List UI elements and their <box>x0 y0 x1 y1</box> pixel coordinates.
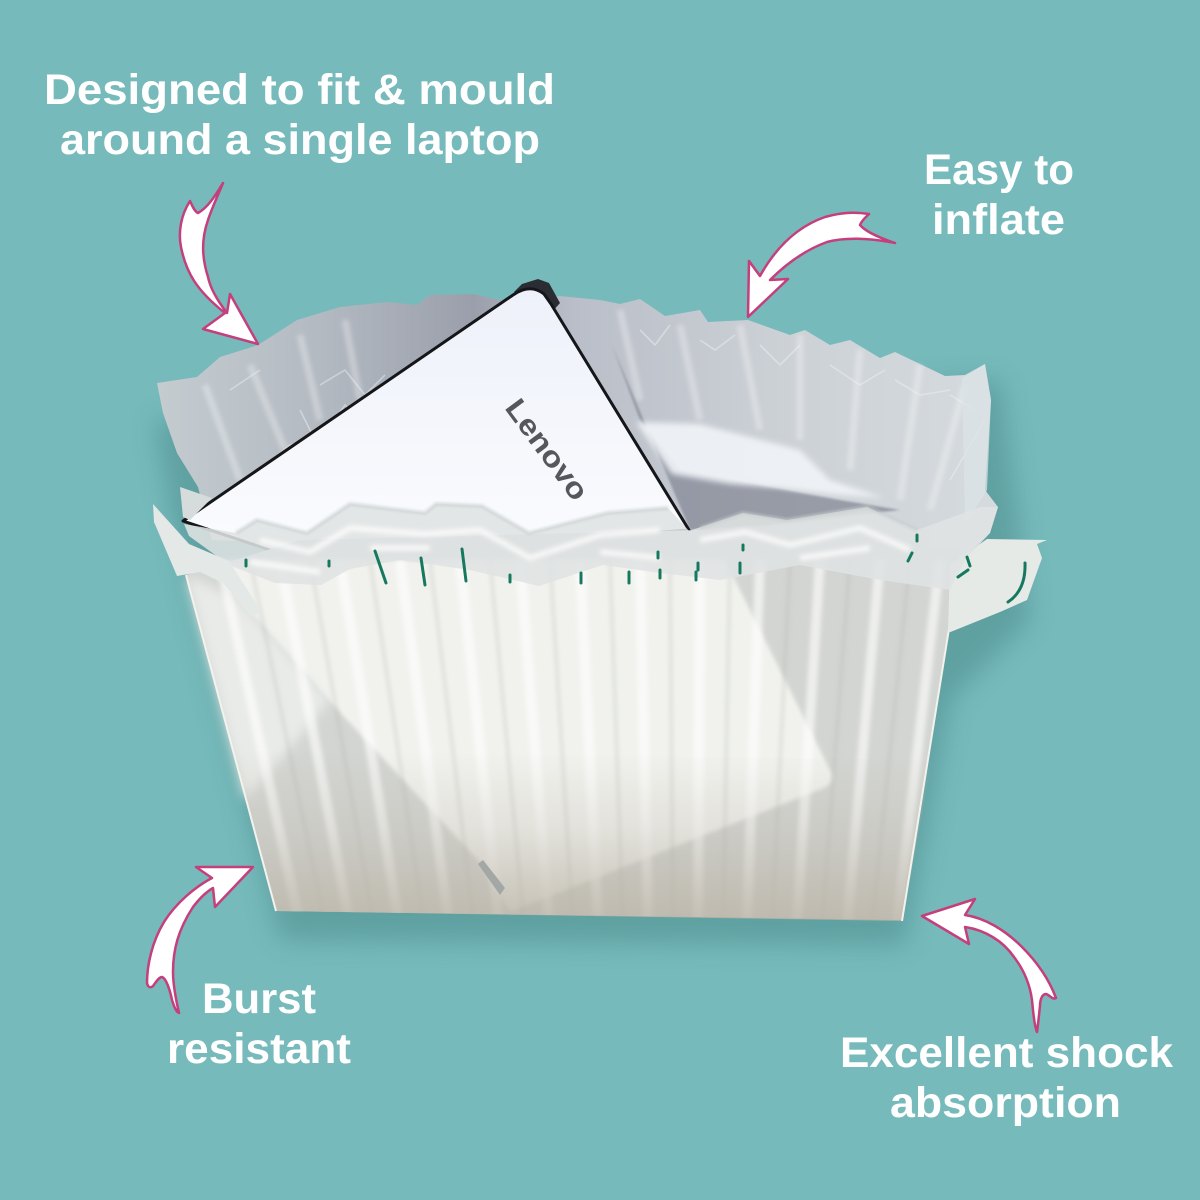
laptop lid back edge <box>514 279 560 312</box>
right wing flap <box>948 539 1047 633</box>
laptop base seen through film <box>205 560 832 912</box>
back wall of bag <box>157 294 998 570</box>
heading: excellent shock absorption <box>840 1029 1173 1127</box>
light left side panel <box>186 575 330 800</box>
laptop logo: Lenovo <box>498 393 594 507</box>
back wall tube highlights <box>205 310 965 510</box>
laptop lid <box>183 289 689 560</box>
heading: easy to inflate: inflate <box>932 196 1065 244</box>
heading: designed to fit: around a single laptop <box>60 116 540 164</box>
small tab on laptop base <box>478 860 505 895</box>
heading: burst resistant: resistant <box>167 1025 351 1073</box>
heading: designed to fit <box>44 66 555 164</box>
arrow: excellent shock absorption <box>922 899 1056 1032</box>
heading: designed to fit: Designed to fit & mould <box>44 66 555 114</box>
light inner wall seen through film <box>636 422 885 498</box>
air tube columns <box>220 560 940 925</box>
tan reflection at bottom of bag <box>234 750 932 921</box>
dark interior gap <box>612 345 900 530</box>
small left flap behind rim <box>180 487 212 520</box>
heading: excellent shock absorption: Excellent shock <box>840 1029 1173 1077</box>
film wrinkles <box>230 325 985 480</box>
heading: excellent shock absorption: absorption <box>890 1079 1121 1127</box>
front inflated rim <box>184 504 998 590</box>
drop shadow under bag <box>155 380 1030 945</box>
heading: easy to inflate: Easy to <box>924 146 1074 194</box>
arrow: easy to inflate <box>748 213 895 317</box>
front wall of bag <box>186 530 960 920</box>
left wing flap <box>153 504 261 617</box>
right side flap <box>962 364 991 525</box>
heading: easy to inflate <box>924 146 1074 244</box>
arrow: burst resistant <box>147 867 253 1013</box>
green inflation valves <box>246 535 1025 602</box>
bright left and right bag edges <box>186 575 952 921</box>
air column bag with laptop <box>153 279 1047 925</box>
heading: burst resistant <box>167 975 351 1073</box>
arrow: designed to fit <box>180 183 258 344</box>
rim highlights <box>236 504 917 572</box>
heading: burst resistant: Burst <box>202 975 316 1023</box>
